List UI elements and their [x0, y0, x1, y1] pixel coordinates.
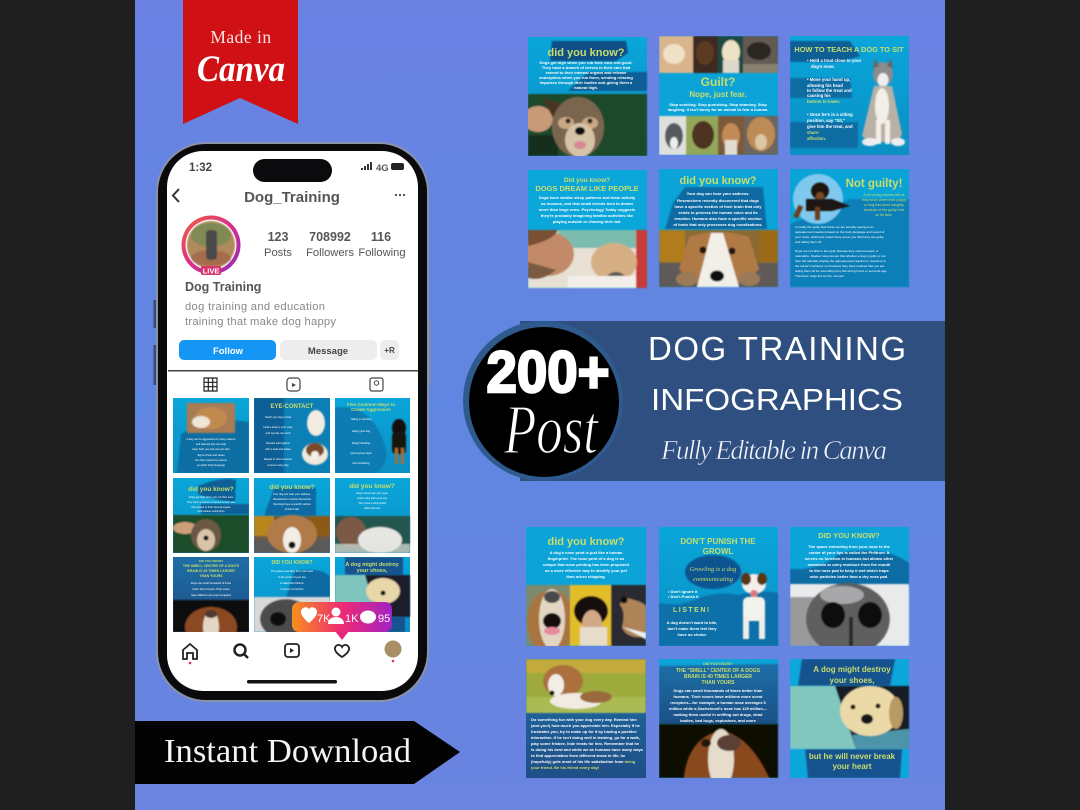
card: do something fun: Do something fun with your dog every day. Remind him [531, 717, 637, 722]
mini post 7: DID YOU KNOW? [199, 559, 223, 563]
mini post 6 [335, 478, 410, 553]
mini post 8: DID YOU KNOW? [271, 560, 313, 566]
instant download arrow [135, 721, 460, 784]
card: not guilty [790, 169, 909, 287]
action buttons: +R [384, 346, 395, 355]
mini post 7: BRAIN IS 40 TIMES LARGER [187, 569, 235, 573]
mini post 9: A dog might destroy [345, 562, 400, 568]
bottom navigation [183, 640, 402, 664]
card: how to teach a dog to sit: dog's nose. [811, 64, 835, 69]
card: nose print: did you know? [548, 536, 625, 548]
mini post 1: are often missed by owners [195, 458, 228, 462]
card: guilt: Guilt? [701, 75, 735, 89]
profile bio [185, 280, 336, 328]
card: not guilty: Dogs are not able to feel guilt, likewise they cannot reason or [795, 249, 879, 253]
action buttons: Message [308, 346, 348, 357]
card: not guilty: they will naturally display the appeasement reaction in response to [795, 259, 886, 263]
card: philtrum [790, 527, 909, 655]
card: philtrum: DID YOU KNOW? [818, 531, 880, 540]
card: not guilty: rationalize. Studies have proven that whether a dog is guilty or not [795, 254, 886, 258]
card: philtrum: odor particles better than a dry nose pad. [810, 574, 888, 579]
mini post 3: Ignoring fear signs [350, 451, 372, 455]
mini post 7: better than humans. Their noses [192, 587, 230, 591]
card: how to teach a dog to sit: • Once he's in a sitting [807, 112, 853, 117]
card: hear your sadness: exists to process the human voice and its [678, 210, 758, 215]
mini post 3: Rough handling [352, 441, 371, 445]
profile stats: 116 [371, 230, 391, 244]
card: how to teach a dog to sit: share [807, 130, 819, 135]
card: how to teach a dog to sit: position, say "Sit," [807, 118, 845, 123]
status bar: 1:32 [189, 162, 212, 174]
card: destroy your shoes: A dog might destroy [813, 665, 891, 674]
mini post 2: and say the cue word [266, 431, 291, 435]
card: nose print: unique that nose printing has been proposed [543, 562, 629, 567]
card: not guilty: on its face. [875, 213, 893, 217]
mini post 2: Hold a treat by your nose [264, 425, 293, 429]
card: hear your sadness: of brain that only processes dog vocalizations. [673, 222, 763, 227]
card: not guilty: they know when their puppy [862, 198, 906, 202]
card: not guilty: Not guilty! [846, 178, 902, 190]
profile header: Dog_Training [244, 189, 340, 206]
mini post 7: THAN YOURS [199, 574, 223, 578]
engagement bubble: 7K [317, 613, 331, 625]
card: philtrum: mammals to carry moisture from the mouth [808, 562, 891, 567]
mini post 5: did you know? [269, 484, 315, 491]
mini post 2: Teach your dog to look [265, 415, 292, 419]
phone body [154, 142, 431, 702]
mini post 4: and release endorphins [197, 509, 225, 513]
mini post 6: called the haw [364, 506, 380, 510]
mini post 2: at home every day [267, 463, 289, 467]
profile bio: training that make dog happy [185, 316, 336, 328]
card: did you know ears: endorphins when you rub them, sending relaxing [539, 75, 633, 80]
mini post 3 [335, 398, 410, 473]
mini post 1: keep both you and your pet safe [192, 447, 230, 451]
ribbon: made in canva [183, 0, 298, 124]
card: nose print: fingerprint. The nose print of a dog is so [548, 556, 625, 561]
card: dogs dream like people: as humans, and that small breeds tend to dream [541, 201, 633, 206]
mini post 2: EYE-CONTACT [271, 404, 314, 410]
card: hear your sadness: emotion. Humans also have a specific section [674, 216, 762, 221]
engagement bubble: 95 [378, 613, 390, 625]
card: nose print: as a more effective way to identify your pet [545, 568, 628, 573]
profile stats: Following [358, 247, 406, 259]
card: destroy your shoes: your heart [832, 762, 872, 771]
mini post 1: and learning why can help [196, 442, 227, 446]
card: how to teach a dog to sit: affection. [807, 136, 826, 141]
mini post 8: The space extending from your nose [271, 569, 314, 573]
card: smell center: million while a Dachshund's nose has 125 million— [669, 706, 767, 711]
card: do something fun: (hopefully) gets most of his life satisfaction from being [531, 759, 636, 764]
card: do something fun: play some frisbee, hide treats for him. Remember that he [531, 741, 640, 746]
card: not guilty: and telling them off. [795, 240, 822, 244]
card: don't punish the growl: • Don't Punish it [668, 594, 699, 599]
profile tabs [168, 370, 418, 391]
ribbon: made in canva: Made in [210, 27, 272, 47]
card: do something fun [526, 659, 646, 778]
mini post 9: your shoes, [357, 568, 388, 574]
card: how to teach a dog to sit [790, 36, 909, 155]
card: did you know ears: did you know? [548, 47, 625, 59]
profile stats: 123 [268, 230, 288, 244]
card: don't punish the growl: Growling is a dog [690, 566, 737, 573]
card: guilt [659, 36, 778, 155]
action buttons: Follow [213, 346, 244, 357]
card: not guilty: appeasement reaction based on the body language and sound of [795, 230, 884, 234]
phone mockup [154, 142, 431, 702]
avatar with live badge [182, 216, 240, 276]
card: guilt: Nope, just fear. [689, 90, 747, 99]
engagement bubble: 1K [345, 613, 359, 625]
mini post 4: that extend to their internal organs [191, 505, 231, 509]
home indicator [247, 680, 337, 684]
card: smell center: bodies, bed bugs, explosives, and more [680, 718, 757, 723]
mini post 5: that dogs have a specific section [273, 502, 311, 506]
card: not guilty: your voice, which just means they sense you think they are guilty [795, 235, 884, 239]
card: did you know ears: impulses through their bodies and giving them a [540, 80, 633, 85]
mini post 2: with a treat and praise [265, 447, 291, 451]
mini post 8: is called the Philtrum [280, 581, 304, 585]
script subtitle: Fully Editable in Canva [660, 435, 887, 465]
mini post 7: have millions more scent receptors [191, 593, 232, 597]
card: don't punish the growl: LISTEN! [673, 607, 711, 614]
card: smell center: making them useful in sniffing out drugs, dead [674, 712, 763, 717]
card: don't punish the growl: A dog doesn't want to bite, [667, 620, 717, 625]
card: dogs dream like people: playing outside or chasing their tail. [553, 219, 621, 224]
mini post 8 [254, 557, 330, 639]
card: do something fun: frustrates you, try to make up for it by having a positive [531, 729, 637, 734]
mini post 4: They have a branch of nerves in their ears [187, 500, 236, 504]
card: how to teach a dog to sit: • Hold a treat close to your [807, 58, 862, 63]
mini post 3: Not socializing [353, 461, 370, 465]
card: not guilty: A lot of dog owners tell us [864, 193, 905, 197]
card: smell center: THE "SMELL" CENTER OF A DOGS [676, 668, 761, 674]
mini post 1: so watch body language [197, 463, 226, 467]
card: hear your sadness: have a specific section of their brain that only [675, 204, 762, 209]
profile bio: Dog Training [185, 280, 261, 294]
badge script: Post [503, 392, 599, 469]
mini post 4: Dogs get high when you rub their ears [189, 495, 234, 499]
title banner [463, 321, 945, 481]
card: not guilty: or dog has been naughty [864, 203, 904, 207]
card: dogs dream like people: Dogs have similar sleep patterns and brain activity [539, 195, 636, 200]
card: dogs dream like people: DOGS DREAM LIKE PEOPLE [535, 184, 639, 193]
card: destroy your shoes [790, 659, 909, 778]
mini post 7 [173, 557, 249, 632]
instant download arrow: Instant Download [164, 733, 411, 770]
profile header [173, 189, 405, 206]
profile stats: Posts [264, 247, 292, 259]
profile stats [264, 230, 406, 259]
profile stats: Followers [306, 247, 354, 259]
card: philtrum: The space extending from your nose to the [808, 544, 891, 549]
card: dogs dream like people [522, 170, 647, 288]
card: hear your sadness: Your dog can hear your sadness. [687, 191, 749, 196]
card: not guilty: the owner's behavior not because they have realized that you are [795, 264, 885, 268]
mini post 4: did you know? [188, 486, 234, 493]
mini post 2 [254, 398, 330, 473]
card: don't punish the growl [659, 527, 778, 646]
card: how to teach a dog to sit: causing his [807, 93, 831, 98]
card: don't punish the growl: have no choice [678, 632, 707, 637]
card: nose print: than micro chipping. [566, 574, 606, 579]
card: smell center [659, 659, 778, 789]
mini post 5: Researchers recently discovered [273, 497, 311, 501]
card: did you know ears: natural high. [574, 85, 598, 90]
card: guilt: laughing. It isn't funny for an animal to fear a human. [668, 107, 768, 112]
card: don't punish the growl: DON'T PUNISH THE [680, 537, 756, 546]
card: dogs dream like people: they're probably imagining familiar activities like [541, 213, 634, 218]
avatar with live badge: LIVE [203, 266, 219, 276]
card: hear your sadness [659, 169, 778, 287]
card: guilt: Stop scolding. Stop punishing. Stop shaming. Stop [669, 102, 767, 107]
mini post 8: to the center of your lips [278, 575, 307, 579]
mini post 2: Repeat in short sessions [264, 457, 293, 461]
card: did you know ears: extend to their internal organs and release [546, 70, 627, 75]
card: how to teach a dog to sit: HOW TO TEACH A DOG TO SIT [794, 45, 904, 54]
headline line 2: INFOGRAPHICS [651, 382, 903, 417]
mini post 7: Dogs can smell thousands of times [191, 581, 232, 585]
card: how to teach a dog to sit: allowing his head [807, 83, 843, 88]
profile stats: 708992 [309, 230, 351, 244]
card: did you know ears: They have a branch of nerves in their ears that [542, 65, 631, 70]
card: how to teach a dog to sit: to follow the treat and [807, 88, 852, 93]
card: not guilty: In reality the guilty look these we are actually seeing is an [795, 225, 874, 229]
headline line 1: DOG TRAINING [648, 330, 906, 367]
card: do something fun: is doing his best and while we as humans have many ways [531, 747, 644, 752]
mini post 4 [173, 478, 249, 553]
ribbon: made in canva: Canva [197, 49, 285, 90]
card: hear your sadness: Researchers recently discovered that dogs [677, 198, 760, 203]
card: nose print [526, 527, 646, 654]
card: how to teach a dog to sit: • Move your hand up, [807, 77, 850, 82]
card: dogs dream like people: more than large ones. Psychology Today suggests [539, 207, 636, 212]
mini post 7: THE SMELL CENTER OF A DOG'S [183, 564, 240, 568]
mini post 1: A dog can be aggressive for many reasons [186, 437, 236, 441]
mini post 5: of their brain [285, 507, 300, 511]
card: destroy your shoes: your shoes, [830, 676, 874, 685]
mini post 9 [335, 557, 410, 632]
card: don't punish the growl: don't make them feel they [668, 626, 717, 631]
mini post 8: It serves no function [280, 587, 304, 591]
card: do something fun: interaction. If he isn't doing well in training, go for a walk, [531, 735, 640, 740]
card: philtrum: to the nose pad to keep it wet which traps [809, 568, 889, 573]
card: not guilty: Therefore, dogs live for the moment. [795, 274, 845, 278]
card: did you know ears [523, 37, 647, 157]
card: don't punish the growl: • Don't ignore it [668, 589, 698, 594]
card: nose print: A dog's nose print is just like a human [550, 550, 623, 555]
card: don't punish the growl: GROWL [703, 547, 733, 556]
mini post 3: Five Common Ways to [347, 402, 395, 407]
card: did you know ears: Dogs get high when you rub their ears real good. [539, 60, 633, 65]
card: do something fun: to find appreciation from different areas in life, he [531, 753, 626, 758]
mini post 2: Reward each glance [266, 441, 290, 445]
mini post 6: They have a third eyelid [358, 501, 386, 505]
card: smell center: THAN YOURS [702, 680, 735, 686]
mini post 3: Hitting your dog [352, 429, 371, 433]
card: do something fun: your friend. Be his friend every day! [531, 765, 599, 770]
card: dogs dream like people: Did you know? [564, 177, 610, 184]
card: not guilty: because of the guilty look [864, 208, 904, 212]
card: hear your sadness: did you know? [680, 175, 757, 187]
card: how to teach a dog to sit: bottom to lower. [807, 99, 840, 104]
mini post 5: Your dog can hear your sadness. [273, 492, 311, 496]
card: smell center: DID YOU KNOW? [703, 662, 733, 666]
card: philtrum: serves no function in humans but allows other [805, 556, 894, 561]
card: how to teach a dog to sit: give him the treat, and [807, 124, 853, 129]
card: do something fun: (and you!) how much you appreciate him. Especially if he [531, 723, 641, 728]
card: smell center: receptors—for example, a human nose averages 5 [670, 700, 767, 705]
card: not guilty: telling them off for something they did wrong hours or seconds ago. [795, 269, 887, 273]
profile bio: dog training and education [185, 301, 325, 313]
card: smell center: Dogs can smell thousands of times better than [674, 688, 763, 693]
card: don't punish the growl: communicating [693, 576, 734, 583]
mini post 1 [173, 398, 249, 473]
card: smell center: humans. Their noses have millions more scent [674, 694, 763, 699]
card: smell center: BRAIN IS 40 TIMES LARGER [684, 674, 752, 680]
mini post 3: Create Aggression [351, 407, 391, 412]
mini post 6: unless they look up at you [357, 496, 388, 500]
card: philtrum: center of your lips is called the Philtrum. It [809, 550, 890, 555]
mini post 6: did you know? [349, 483, 395, 490]
post grid [173, 398, 410, 647]
mini post 6: Dogs cannot see your eyes [356, 491, 388, 495]
action buttons [179, 340, 399, 360]
badge number: 200+ [486, 340, 610, 405]
engagement bubble [292, 602, 392, 640]
mini post 3: Yelling or shouting [350, 417, 372, 421]
mini post 5 [254, 478, 330, 553]
status bar: 4G [376, 163, 389, 174]
status bar [189, 159, 404, 182]
mini post 1: Signs of fear and stress [197, 453, 225, 457]
card: destroy your shoes: but he will never break [809, 752, 896, 761]
